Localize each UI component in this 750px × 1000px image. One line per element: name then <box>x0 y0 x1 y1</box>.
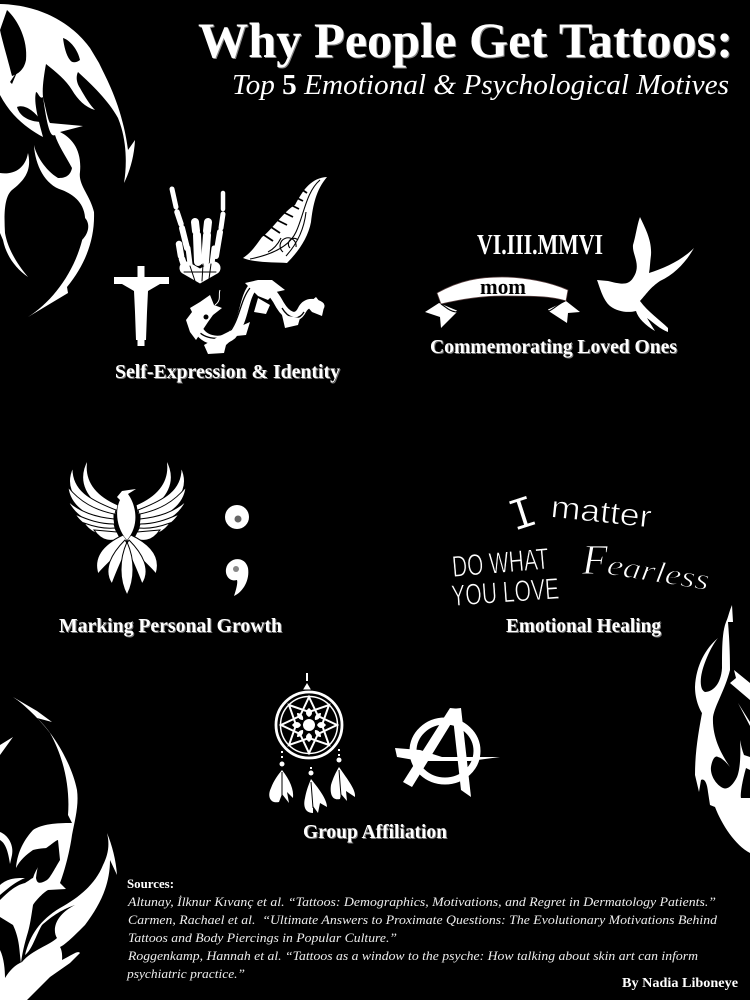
icon: dreamcatcher <box>269 673 355 813</box>
text: I matter: I <box>502 487 544 545</box>
tribal ornament: top left <box>0 4 135 317</box>
text: do what you love <box>450 543 560 613</box>
text: fearless: earless <box>605 548 712 597</box>
label: group affiliation: Group Affiliation <box>303 821 447 843</box>
text: do what you love: YOU LOVE <box>450 573 560 613</box>
sources block: Roggenkamp, Hannah et al. “Tattoos as a window to the psyche: How talking about skin art can inform <box>127 949 698 963</box>
icon: skeleton rock hand <box>172 189 223 281</box>
icon: semicolon <box>225 505 249 596</box>
icon: anarchy symbol <box>395 708 500 797</box>
icon: dove <box>597 217 694 332</box>
sources block <box>126 877 718 981</box>
banner word: mom <box>480 274 526 299</box>
text: fearless: F <box>581 538 608 584</box>
icon: phoenix <box>68 459 186 595</box>
tribal ornament: bottom left <box>0 697 117 1000</box>
text: roman numeral date: VI.III.MMVI <box>477 229 603 261</box>
subtitle: Top 5 Emotional & Psychological Motives <box>232 69 729 101</box>
sources block: Sources: <box>127 877 174 891</box>
sources block: psychiatric practice.” <box>126 967 245 981</box>
icon: dragon <box>186 280 324 354</box>
sources block: Carmen, Rachael et al. “Ultimate Answers to Proximate Questions: The Evolutionary Motivations Behind <box>128 913 718 927</box>
icon: maori fern leaf <box>243 177 327 263</box>
text: fearless <box>581 538 712 597</box>
icon: crucifix <box>114 266 169 346</box>
text: I matter <box>502 487 653 545</box>
title: Why People Get Tattoos: <box>198 12 733 68</box>
sources block: Tattoos and Body Piercings in Popular Culture.” <box>128 931 397 945</box>
tribal ornament: right edge <box>695 605 750 853</box>
byline: By Nadia Liboneye <box>622 976 738 991</box>
label: personal growth: Marking Personal Growth <box>59 615 282 637</box>
label: self-expression: Self-Expression & Identity <box>115 361 340 383</box>
label: emotional healing: Emotional Healing <box>506 615 661 637</box>
text: I matter: matter <box>549 489 653 535</box>
text: do what you love: DO WHAT <box>451 543 550 584</box>
label: commemorating: Commemorating Loved Ones <box>430 336 677 358</box>
icon: mom banner <box>425 274 580 328</box>
sources block: Altunay, İlknur Kıvanç et al. “Tattoos: Demographics, Motivations, and Regret in Dermatology Patients.” <box>127 895 716 909</box>
